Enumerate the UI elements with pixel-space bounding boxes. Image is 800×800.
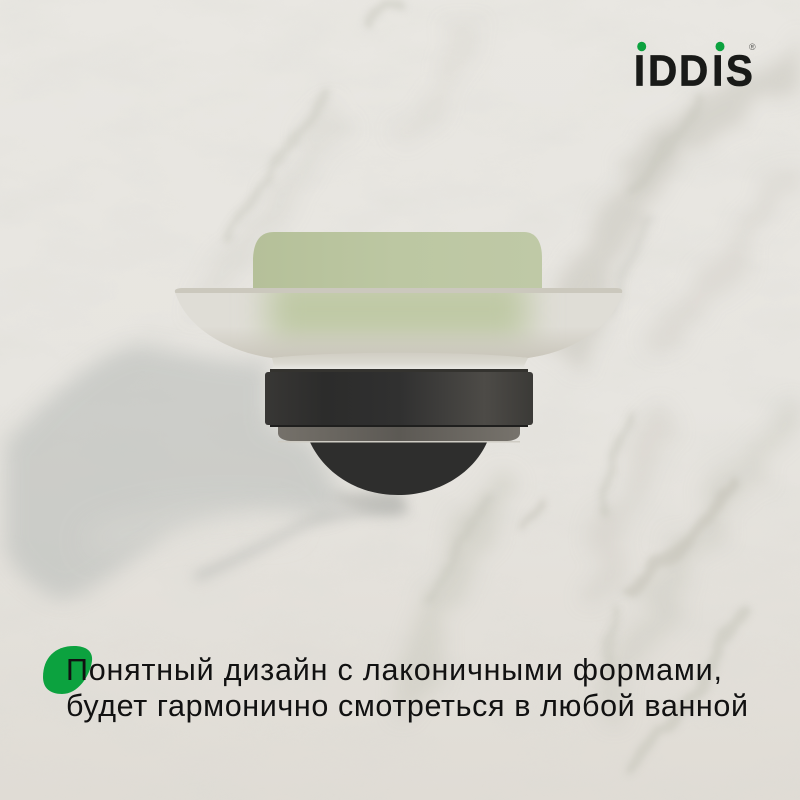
caption: Понятный дизайн с лаконичными формами, <box>66 653 722 687</box>
frosted glass dish <box>174 288 622 358</box>
lower lip <box>278 425 520 441</box>
dark trim line <box>270 369 528 372</box>
soap bar <box>253 232 542 290</box>
logo: IDDIS: ® <box>749 42 756 52</box>
green accent blob <box>43 646 92 694</box>
logo: IDDIS: IDDIS <box>634 46 753 95</box>
wall plate <box>309 440 488 495</box>
caption <box>66 653 748 723</box>
dish neck <box>270 353 528 370</box>
black metal ring <box>265 372 533 442</box>
cast shadow on wall <box>5 345 410 600</box>
caption: будет гармонично смотреться в любой ванной <box>66 689 748 723</box>
soap dish product <box>170 232 630 495</box>
